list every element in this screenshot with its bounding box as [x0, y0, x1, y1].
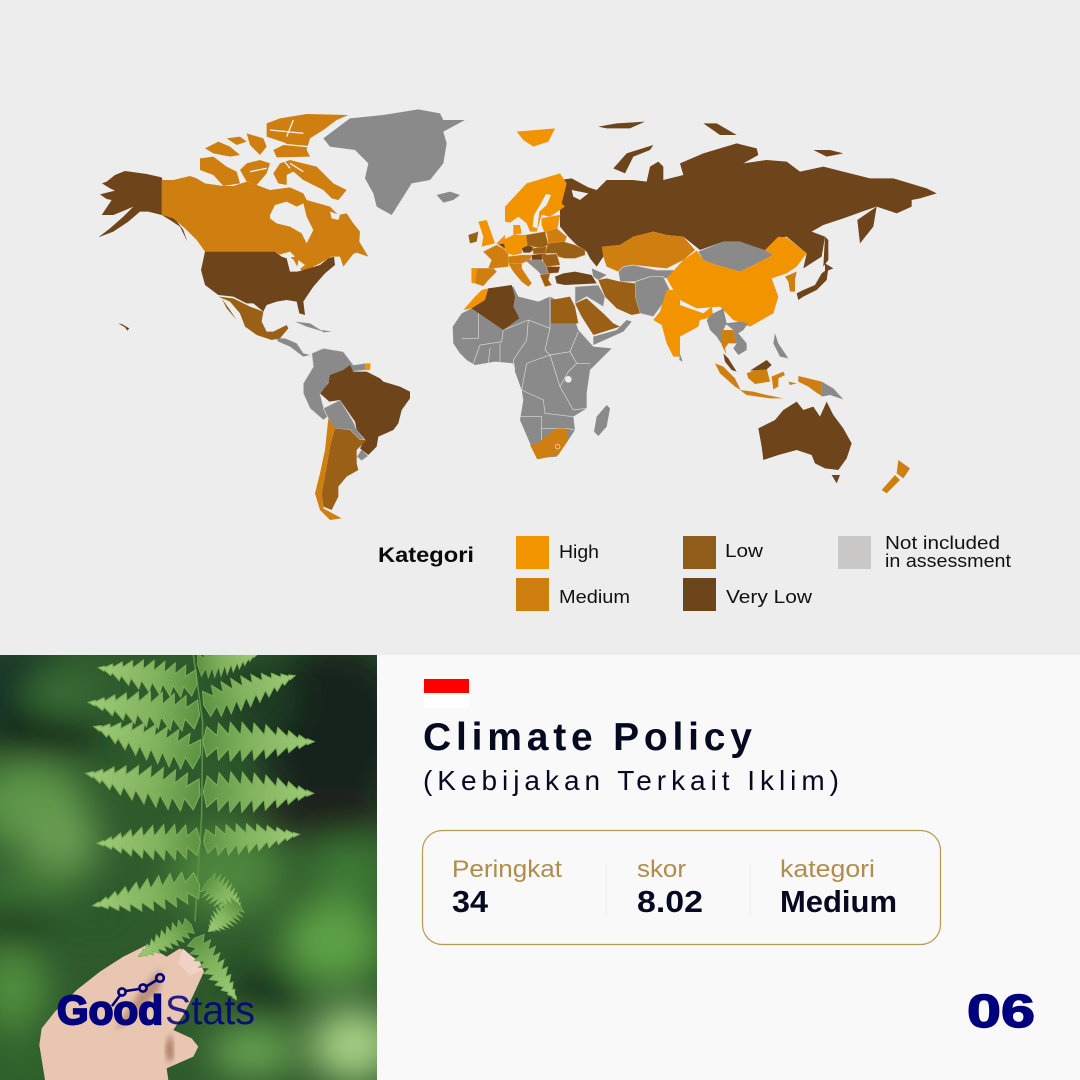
- European countries: [468, 215, 585, 287]
- Australia: [758, 402, 852, 483]
- map: Americas: [98, 109, 465, 520]
- Russia: [560, 143, 937, 268]
- northern South America: [303, 348, 367, 420]
- map: Europe, Africa, Asia, Oceania: [453, 122, 937, 493]
- blurred forest background: [0, 655, 377, 1080]
- Russian islands: [598, 122, 877, 267]
- legend: high: High: [559, 542, 599, 562]
- Egypt: [551, 297, 578, 323]
- Portugal: [472, 268, 477, 283]
- Kazakhstan: [602, 232, 695, 272]
- Chile: [315, 418, 342, 520]
- South Africa: [530, 428, 568, 459]
- Scandinavia: [505, 173, 567, 232]
- Saudi Arabia: [575, 298, 620, 335]
- Italy: [508, 263, 532, 287]
- African borders: [462, 297, 590, 442]
- hand shadow: [115, 968, 160, 1030]
- Baltics: [542, 215, 560, 233]
- stat: peringkat: [452, 856, 562, 919]
- logo wordmark Good: Good: [57, 987, 163, 1033]
- Caucasus: [592, 268, 607, 280]
- Turkey: [555, 272, 597, 285]
- card outline: [422, 830, 940, 944]
- Afghanistan and Pakistan: [635, 277, 670, 317]
- finger shadow: [166, 1033, 173, 1063]
- Lesotho: [555, 444, 560, 449]
- logo: GoodStats: [57, 974, 255, 1033]
- Arctic channels: [250, 120, 308, 172]
- legend: medium: [516, 578, 630, 611]
- Papua New Guinea: [822, 382, 843, 399]
- Greenland and Iceland: [323, 109, 465, 215]
- Ukraine: [545, 242, 585, 258]
- Greece: [540, 273, 552, 287]
- India: [653, 290, 713, 357]
- legend: low: Low: [725, 541, 764, 561]
- Gulf of Bothnia: [533, 194, 551, 228]
- Madagascar: [594, 405, 610, 436]
- Poland: [526, 232, 548, 248]
- stat: peringkat: 34: [452, 884, 489, 919]
- info panel background: [377, 655, 1080, 1080]
- Iraq and Syria: [575, 285, 605, 307]
- Canada: [162, 114, 368, 272]
- logo wordmark Stats: Stats: [165, 987, 255, 1033]
- Morocco: [463, 288, 488, 310]
- stat: kategori: kategori: [780, 856, 875, 883]
- Alpine countries: [508, 255, 532, 263]
- Svalbard: [517, 128, 555, 147]
- Bolivia, Paraguay, Uruguay: [323, 400, 368, 461]
- subtitle: (Kebijakan Terkait Iklim): [423, 765, 839, 796]
- New Zealand: [882, 460, 910, 493]
- legend: high: [516, 536, 599, 569]
- Brazil: [320, 365, 410, 455]
- Yemen and Oman: [593, 320, 632, 345]
- Central Asia: [618, 265, 677, 282]
- legend: low: [683, 536, 764, 569]
- legend: not included: Not included: [885, 533, 1000, 553]
- title: Climate Policy: [423, 716, 752, 759]
- Hawaii: [118, 323, 129, 331]
- stats card: [422, 830, 940, 944]
- stat: skor: skor: [637, 856, 686, 883]
- Hudson Bay: [270, 202, 340, 243]
- icon: Indonesian flag: [424, 679, 469, 708]
- legend: not included: [838, 533, 1011, 571]
- White Sea: [572, 190, 588, 200]
- page number: 06: [967, 985, 1035, 1037]
- Benelux: [497, 235, 505, 250]
- Ireland: [468, 232, 478, 243]
- Mexico: [218, 297, 288, 340]
- fern: [82, 640, 314, 1007]
- stat: skor: [637, 856, 703, 919]
- legend: very low: [683, 578, 813, 611]
- stat: kategori: [780, 856, 897, 919]
- legend: not included: in assessment: [885, 551, 1011, 571]
- Alaska: [98, 171, 187, 242]
- logo graph line: [112, 974, 164, 1006]
- stat: skor: 8.02: [637, 884, 703, 919]
- stat: kategori: Medium: [780, 884, 897, 919]
- photo: hand holding fern: [0, 655, 377, 1080]
- thumbnail: [178, 948, 203, 976]
- Czechia: [522, 245, 535, 253]
- Korea: [785, 272, 797, 292]
- Lake Victoria: [565, 376, 572, 383]
- France: [483, 245, 508, 268]
- Southeast Asia grey: [679, 308, 788, 362]
- Balkans: [525, 260, 548, 275]
- Central America and Caribbean: [276, 322, 332, 357]
- Belgium: [498, 243, 505, 249]
- Denmark: [513, 225, 522, 235]
- China: [667, 237, 807, 327]
- Great Lakes: [278, 252, 305, 272]
- Romania: [542, 254, 560, 267]
- Argentina: [322, 428, 367, 510]
- hand: [39, 945, 204, 1080]
- Algeria: [472, 285, 519, 330]
- legend: very low: Very Low: [726, 587, 813, 607]
- Spain: [472, 268, 497, 286]
- Belarus: [547, 228, 567, 243]
- world map: [98, 109, 937, 520]
- legend title: Kategori: [378, 544, 474, 567]
- Bulgaria: [547, 267, 560, 273]
- USA: [201, 252, 335, 315]
- legend: medium: Medium: [559, 587, 630, 607]
- Africa: [453, 287, 612, 458]
- Germany: [503, 235, 528, 255]
- stat: peringkat: Peringkat: [452, 856, 562, 883]
- Iran: [598, 278, 640, 315]
- Thailand: [722, 330, 737, 355]
- Malaysia: [723, 353, 772, 372]
- Hungary: [532, 253, 547, 260]
- Indonesia: [715, 363, 822, 398]
- French Guiana: [365, 363, 371, 370]
- Japan: [797, 263, 833, 300]
- UK: [478, 220, 495, 247]
- Slovakia: [533, 247, 547, 254]
- map section background: [0, 0, 1080, 655]
- Mongolia: [698, 242, 773, 272]
- legend: [378, 533, 1011, 611]
